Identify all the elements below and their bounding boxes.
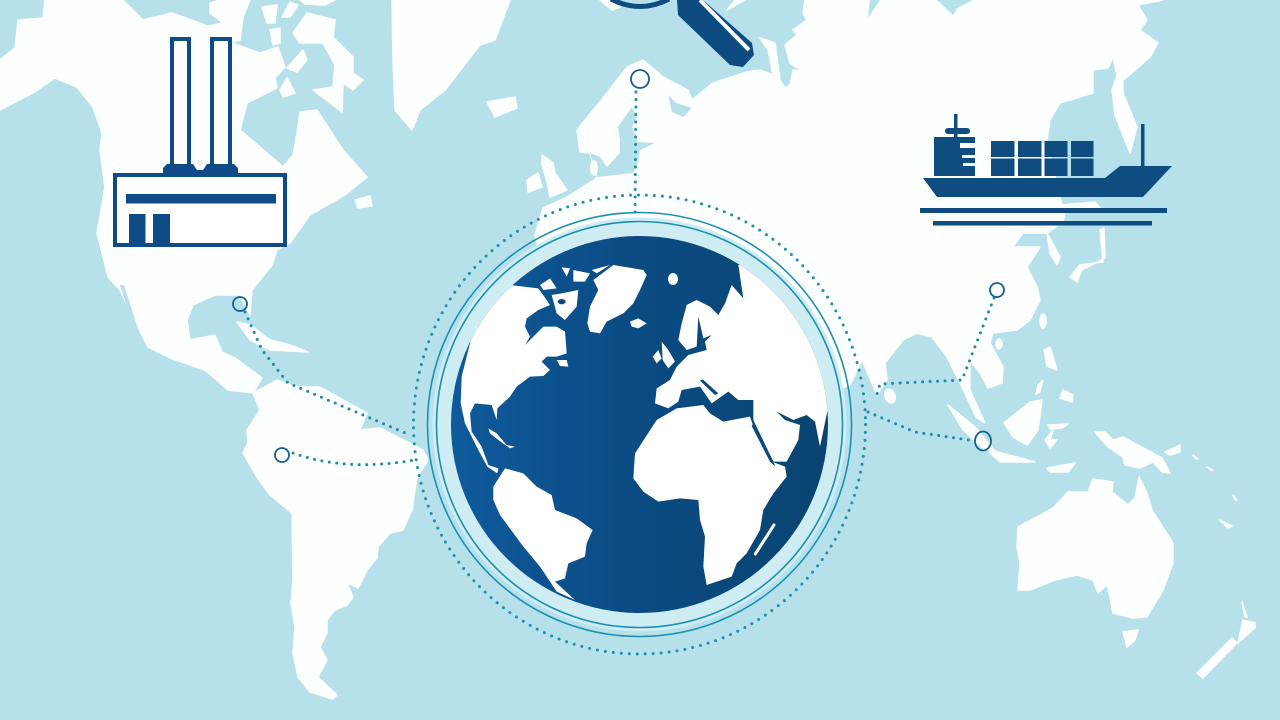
chimney bases bbox=[163, 164, 238, 174]
small northern islets bbox=[600, 0, 745, 10]
continent: Australia bbox=[1017, 477, 1173, 618]
globe Eurasia bbox=[655, 257, 833, 462]
icon: factory bbox=[115, 39, 285, 245]
globe continents bbox=[461, 257, 833, 600]
globe inland seas bbox=[558, 299, 776, 466]
route: Florida to globe bbox=[245, 312, 410, 435]
hull bbox=[923, 166, 1172, 197]
funnel and mast bbox=[945, 114, 970, 137]
Danish island bbox=[590, 160, 598, 176]
Tasmania bbox=[1123, 630, 1138, 647]
East Asia islands bbox=[883, 228, 1105, 404]
globe Africa bbox=[633, 405, 787, 585]
route: Scandinavia to globe bbox=[635, 92, 636, 215]
globe halo band bbox=[432, 218, 846, 632]
continent: South America bbox=[243, 380, 428, 699]
globe Britain and Ireland bbox=[653, 342, 675, 368]
map water details bbox=[120, 0, 973, 332]
location markers bbox=[233, 70, 1004, 462]
globe ocean bbox=[451, 236, 828, 613]
continent: Greenland bbox=[392, 0, 510, 130]
chimneys bbox=[172, 39, 230, 167]
factory body bbox=[115, 175, 285, 245]
globe Greenland bbox=[587, 265, 647, 333]
globe North America bbox=[461, 285, 567, 473]
globe bbox=[451, 236, 833, 613]
globe Iceland bbox=[630, 318, 647, 328]
handle highlight bbox=[700, 0, 749, 50]
globe arctic islands bbox=[488, 265, 610, 448]
bridge bbox=[934, 137, 975, 176]
factory doors bbox=[129, 214, 170, 244]
handle bbox=[677, 0, 754, 67]
Baltic Sea bbox=[590, 107, 655, 177]
factory band bbox=[126, 194, 276, 204]
United Kingdom and Ireland bbox=[527, 155, 567, 197]
lens ring bbox=[611, 0, 669, 6]
continent: Eurasia bbox=[535, 0, 1163, 440]
route: Java to globe bbox=[868, 412, 975, 441]
globe Svalbard bbox=[668, 273, 678, 285]
Iceland bbox=[487, 97, 517, 117]
outer rings bbox=[428, 212, 852, 636]
Pacific islets bbox=[1220, 495, 1237, 528]
New Zealand bbox=[1197, 602, 1255, 678]
Gulf of California bbox=[120, 285, 139, 332]
northern sea inlets bbox=[868, 0, 973, 18]
globe Madagascar bbox=[755, 525, 774, 554]
icon: container ship bbox=[920, 114, 1172, 226]
water lines bbox=[920, 208, 1167, 226]
globe South America bbox=[493, 468, 593, 600]
route: South America to globe bbox=[293, 453, 415, 465]
route: China to India bbox=[877, 298, 994, 394]
dotted orbit ring bbox=[414, 195, 866, 654]
Southeast Asia islands bbox=[948, 400, 1213, 473]
icon: magnifying glass bbox=[611, 0, 754, 67]
containers bbox=[991, 141, 1094, 176]
continent: North America bbox=[0, 0, 367, 393]
White Sea bbox=[668, 95, 692, 117]
bow mast bbox=[1141, 124, 1144, 167]
arctic islands bbox=[203, 0, 372, 352]
